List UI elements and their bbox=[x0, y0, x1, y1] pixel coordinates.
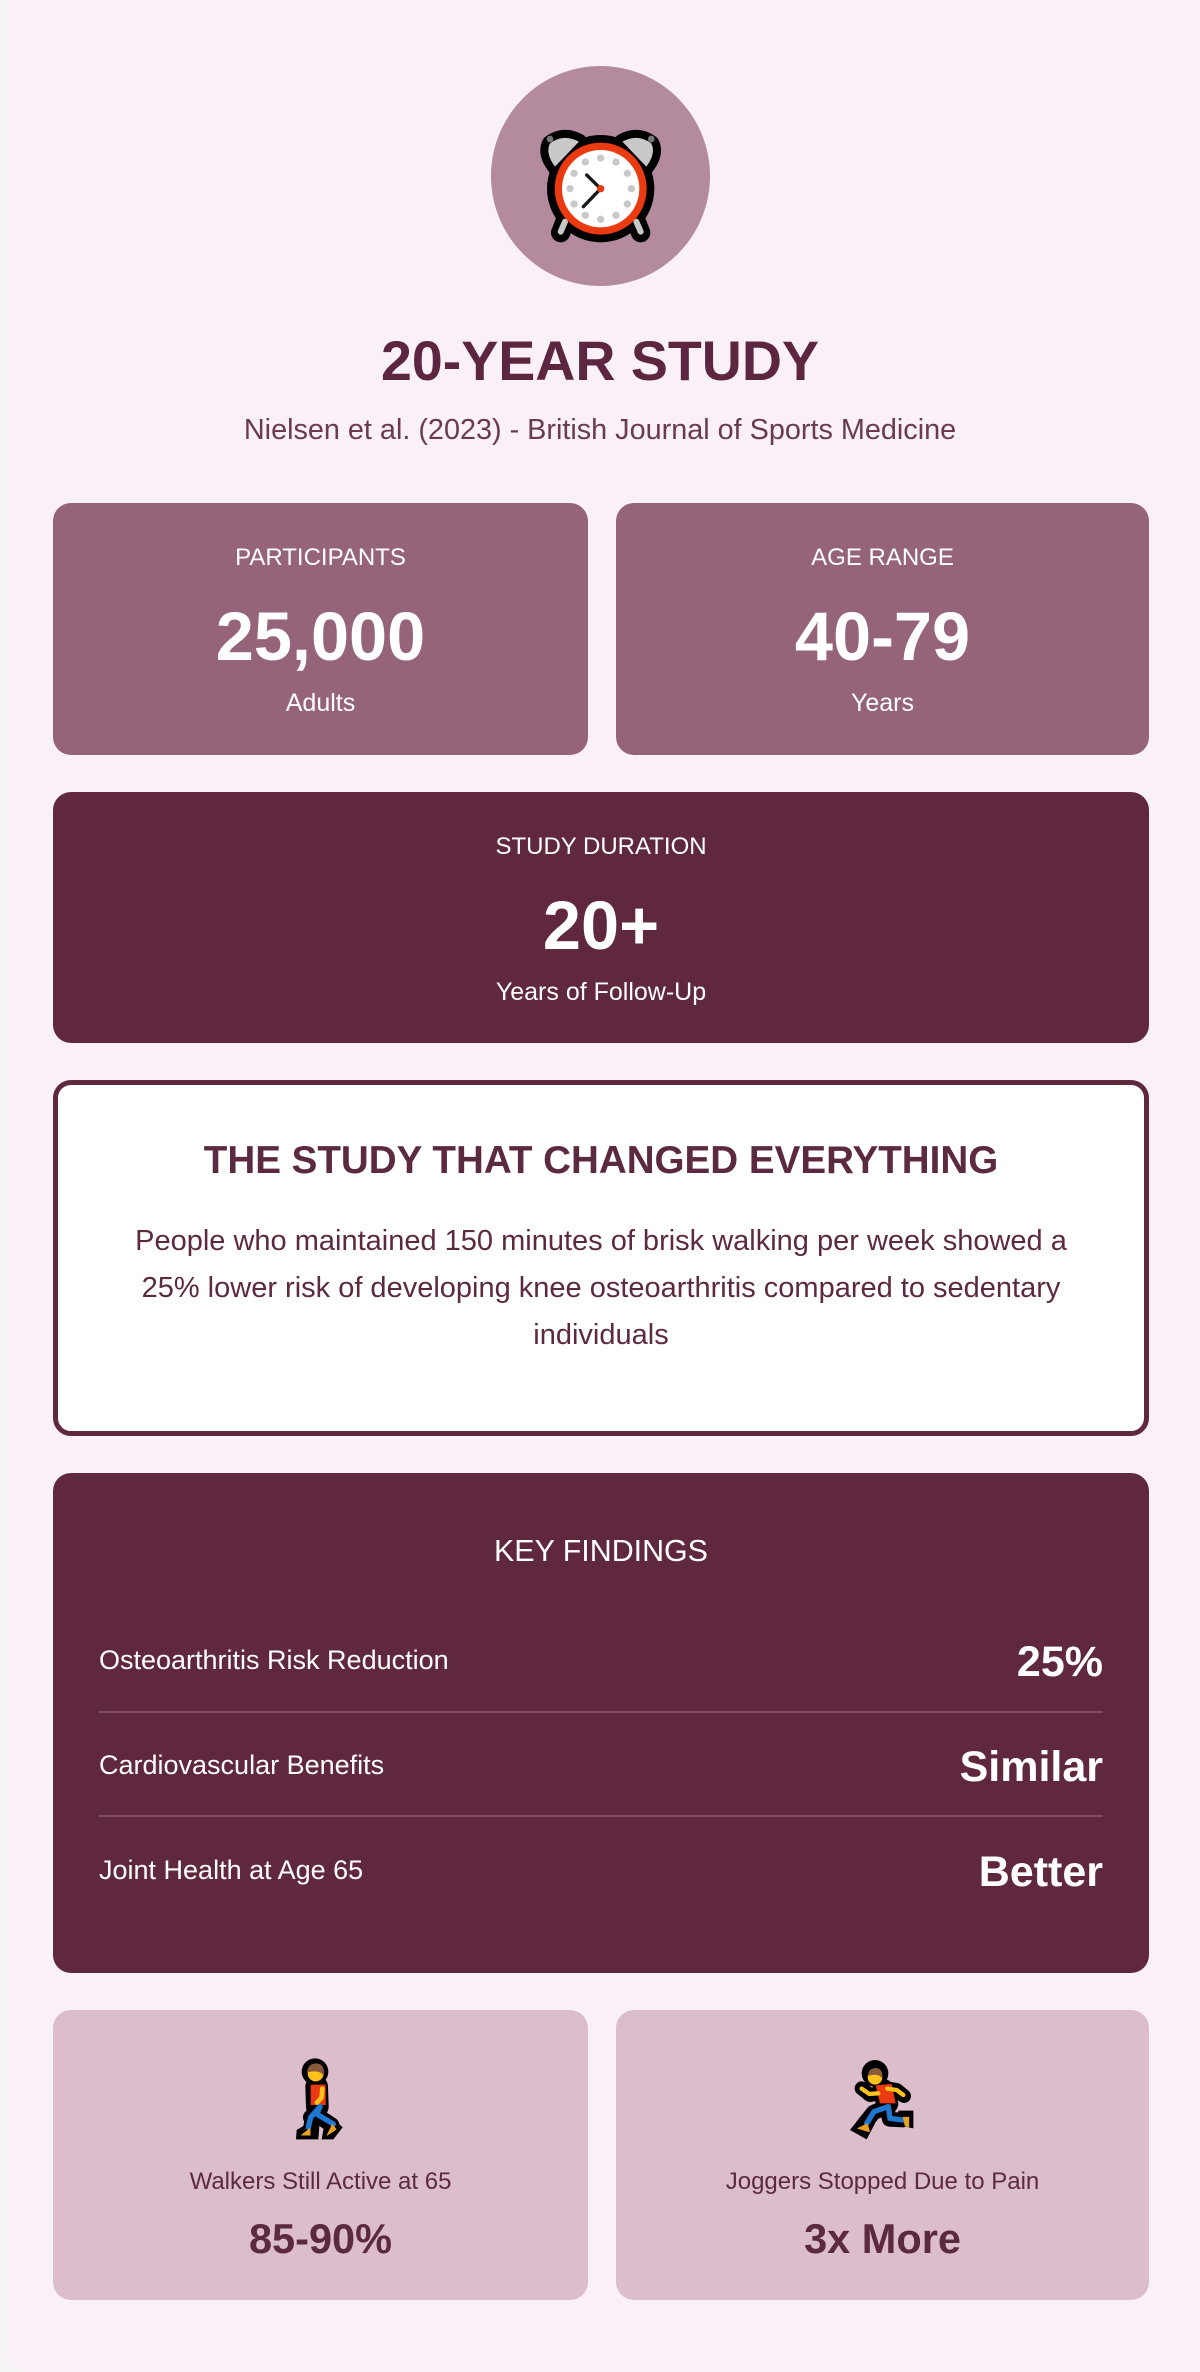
participants unit: Adults bbox=[286, 689, 355, 717]
joggers value: 3x More bbox=[804, 2215, 961, 2262]
icon: walking person bbox=[296, 2058, 343, 2140]
panel: study that changed everything bbox=[53, 1080, 1149, 1436]
study duration unit: Years of Follow-Up bbox=[496, 978, 706, 1006]
study duration label: STUDY DURATION bbox=[495, 833, 707, 860]
finding row: cardiovascular: Cardiovascular Benefits bbox=[99, 1750, 384, 1780]
panel paragraph: People who maintained 150 minutes of brisk walking per week showed a bbox=[135, 1225, 1067, 1257]
panel: key findings bbox=[53, 1473, 1149, 1973]
participants label: PARTICIPANTS bbox=[235, 544, 406, 571]
panel heading: THE STUDY THAT CHANGED EVERYTHING bbox=[204, 1139, 998, 1182]
participants value: 25,000 bbox=[216, 598, 425, 675]
age range unit: Years bbox=[851, 689, 914, 717]
panel: joggers bbox=[616, 2010, 1149, 2300]
study duration value: 20+ bbox=[543, 887, 659, 964]
panel paragraph bbox=[135, 1225, 1067, 1351]
title: 20-YEAR STUDY bbox=[381, 330, 819, 392]
finding row: osteoarthritis bbox=[99, 1638, 1103, 1686]
panel paragraph: individuals bbox=[533, 1319, 669, 1351]
joggers label: Joggers Stopped Due to Pain bbox=[726, 2168, 1039, 2195]
finding row: osteoarthritis: 25% bbox=[1017, 1638, 1103, 1686]
icon badge circle bbox=[491, 66, 710, 286]
finding row: joint health: Joint Health at Age 65 bbox=[99, 1855, 363, 1885]
panel: age range bbox=[616, 503, 1149, 755]
finding row: cardiovascular: Similar bbox=[960, 1743, 1103, 1791]
icon: running person bbox=[850, 2060, 914, 2140]
panel paragraph: 25% lower risk of developing knee osteoarthritis compared to sedentary bbox=[142, 1272, 1060, 1304]
key findings heading: KEY FINDINGS bbox=[494, 1534, 708, 1568]
panel: participants bbox=[53, 503, 588, 755]
finding row: joint health: Better bbox=[979, 1848, 1103, 1896]
age range value: 40-79 bbox=[795, 598, 970, 675]
finding row: osteoarthritis: Osteoarthritis Risk Reduction bbox=[99, 1645, 449, 1675]
finding row: joint health bbox=[99, 1848, 1103, 1896]
panel: walkers bbox=[53, 2010, 588, 2300]
age range label: AGE RANGE bbox=[811, 544, 954, 571]
walkers label: Walkers Still Active at 65 bbox=[190, 2168, 451, 2195]
finding row: cardiovascular bbox=[99, 1743, 1103, 1791]
panel: study duration bbox=[53, 792, 1149, 1043]
walkers value: 85-90% bbox=[249, 2215, 392, 2262]
icon: alarm clock bbox=[540, 130, 662, 242]
subtitle: Nielsen et al. (2023) - British Journal of Sports Medicine bbox=[244, 414, 956, 446]
